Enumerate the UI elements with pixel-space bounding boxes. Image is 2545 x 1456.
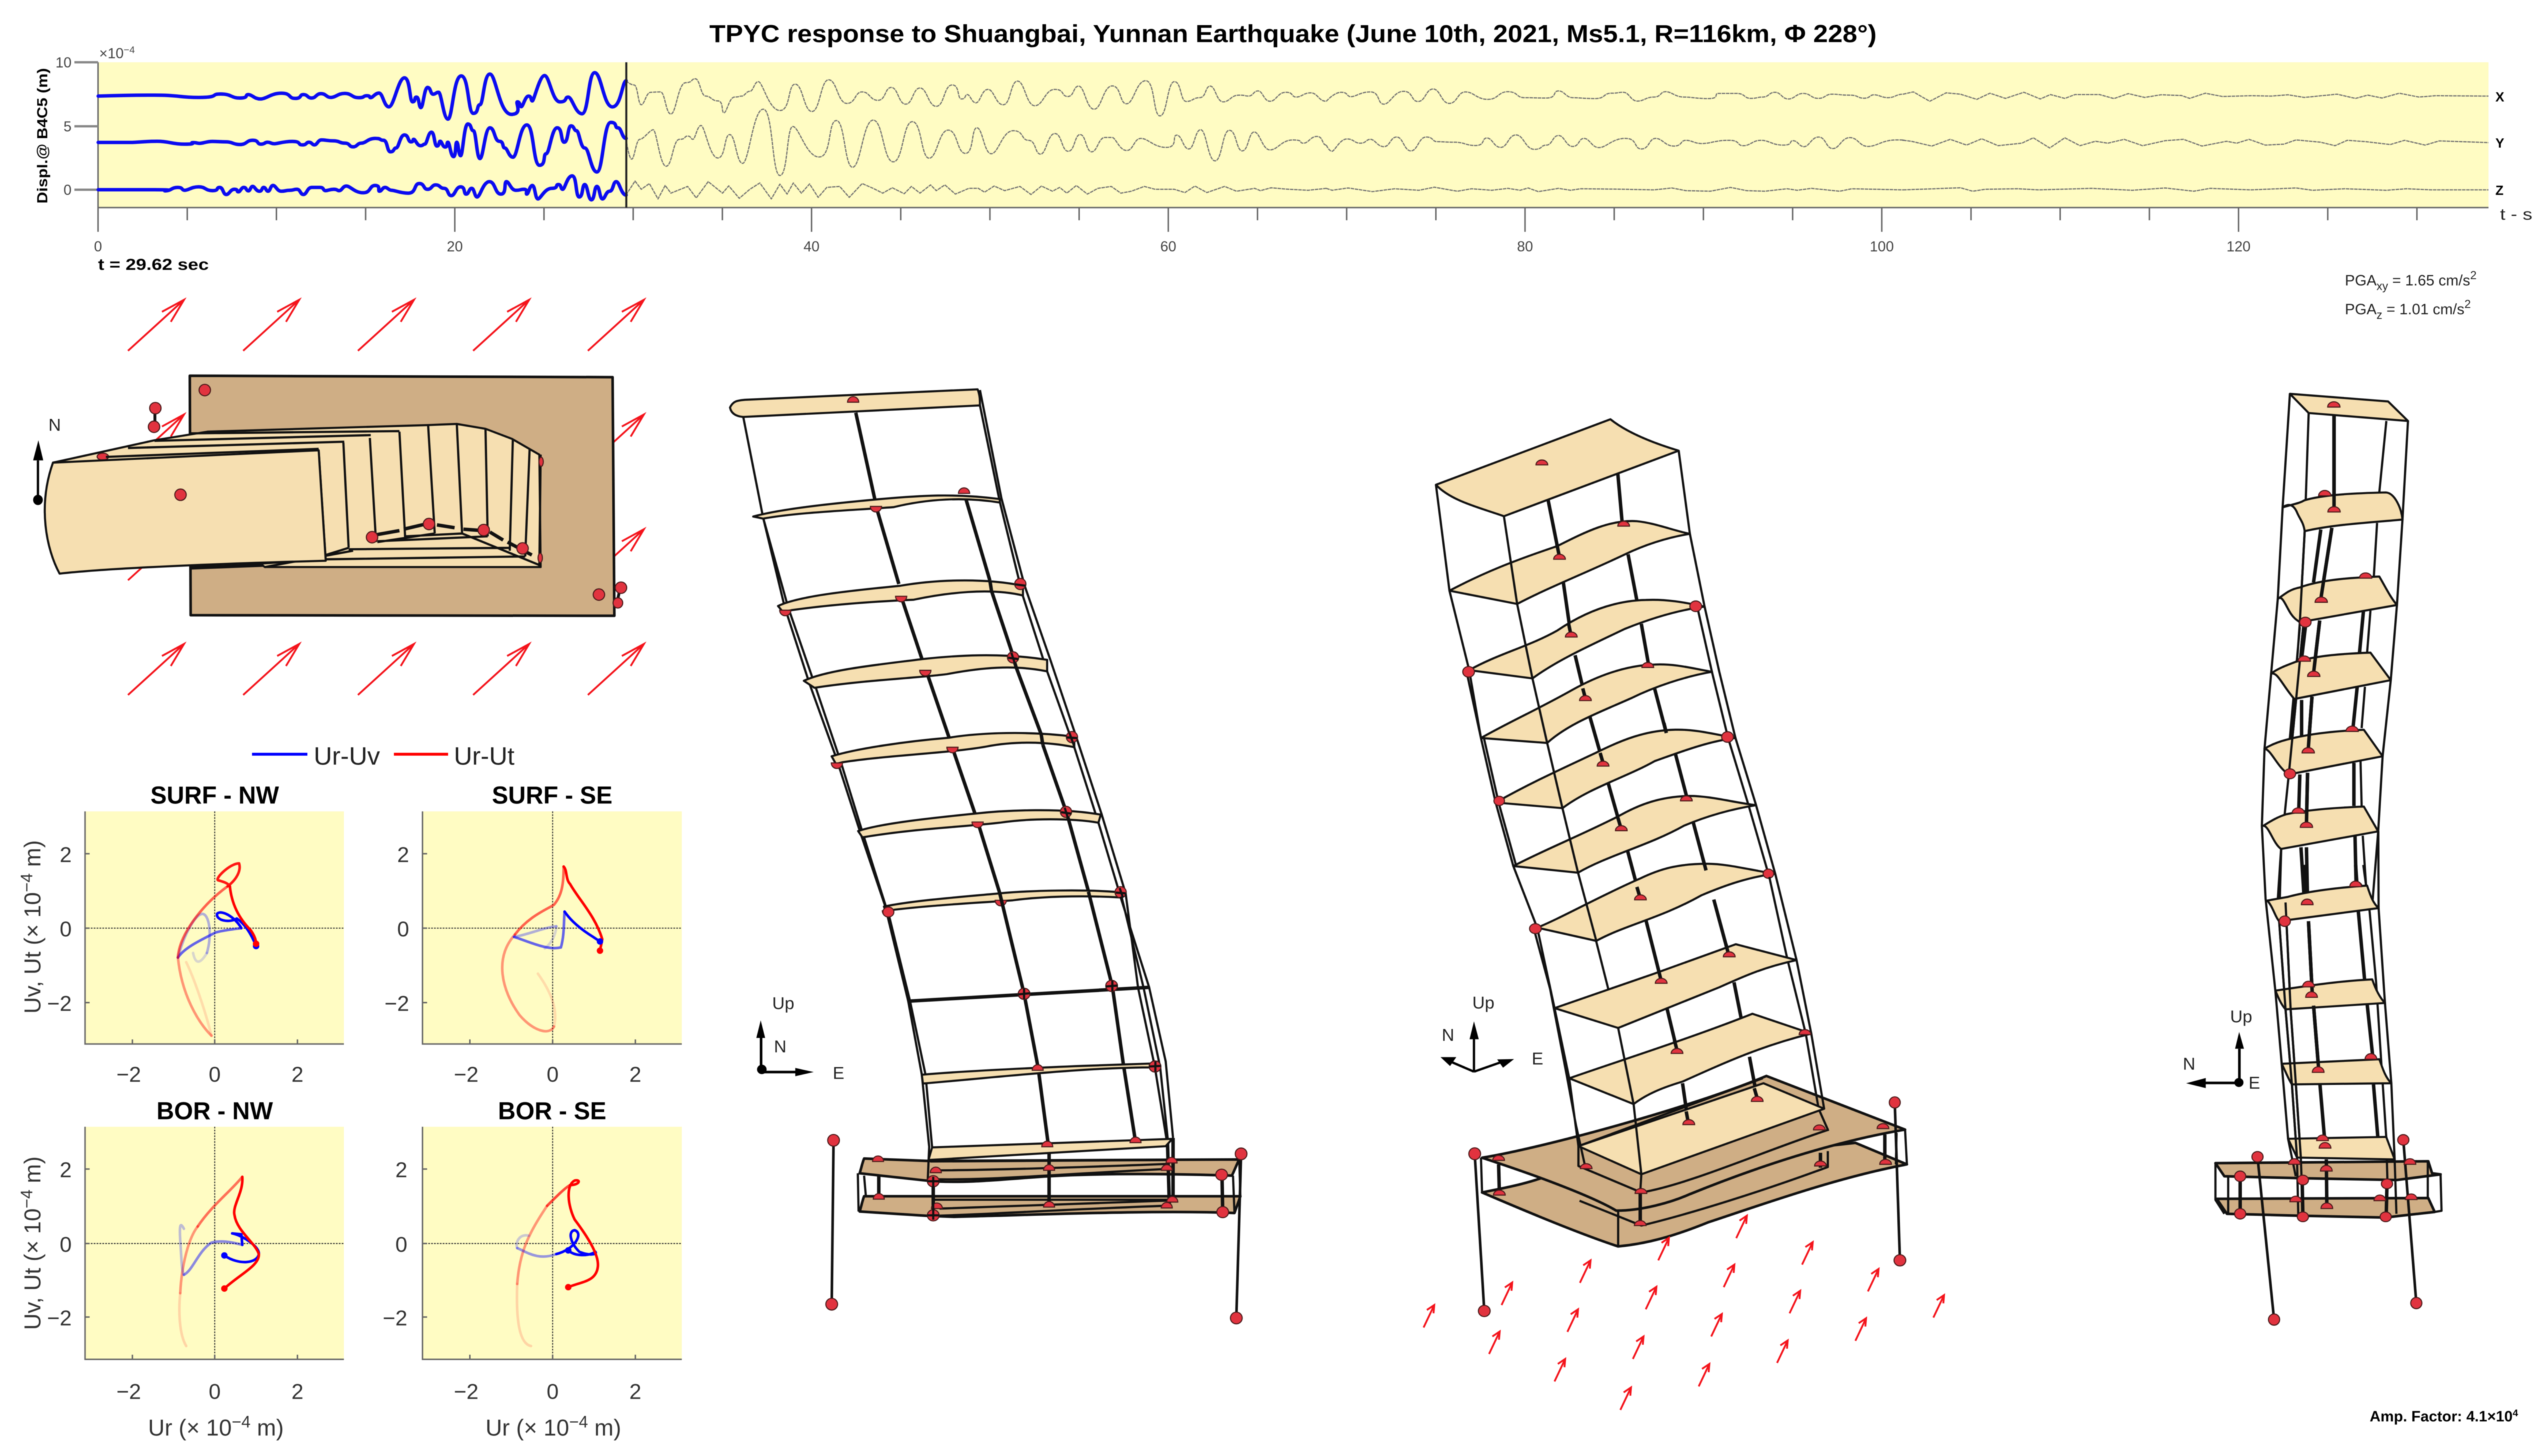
- x axis title: −4: [569, 1413, 588, 1431]
- roof: [45, 450, 326, 574]
- axis lines and ticks: [98, 62, 2488, 232]
- sensors: [1493, 924, 1892, 1225]
- ground motion arrows: [128, 300, 644, 695]
- tick labels: −2: [47, 991, 72, 1015]
- y axis title: −4: [18, 873, 36, 892]
- plot background: [98, 62, 2488, 208]
- upper slab: [1482, 1076, 1905, 1211]
- legend: [252, 742, 514, 770]
- tick labels: −2: [454, 1379, 479, 1404]
- compass labels: [772, 994, 844, 1083]
- tick labels: 2: [291, 1379, 303, 1404]
- tick labels: 0: [209, 1062, 221, 1086]
- compass labels: E: [2249, 1074, 2260, 1093]
- tick labels: 2: [397, 842, 409, 867]
- panel title: SURF - NW: [151, 782, 279, 809]
- front column lower and column stubs: [1618, 1028, 1641, 1192]
- compass: north up east: [2186, 1032, 2244, 1088]
- orbit panels: [18, 782, 682, 1441]
- lower slab: [1482, 1143, 1907, 1247]
- tick labels: 2: [629, 1062, 641, 1086]
- slab and column strokes over sensors: [927, 981, 1161, 1220]
- compass labels: N: [774, 1037, 787, 1056]
- title: TPYC response to Shuangbai, Yunnan Earthquake (June 10th, 2021, Ms5.1, R=116km, Φ 228°): [709, 20, 1877, 48]
- y axis labels: −4: [123, 44, 135, 55]
- floor slabs: [2264, 394, 2408, 849]
- sensors: [2284, 402, 2372, 887]
- basement slab: [190, 376, 614, 616]
- slab edge strokes over sensors: [1008, 584, 1126, 897]
- x axis title: −4: [232, 1413, 250, 1431]
- current time cursor: [625, 62, 627, 208]
- y axis labels: ×10: [99, 46, 123, 62]
- piles: [2257, 1140, 2416, 1319]
- building: isometric view: [1423, 419, 1944, 1410]
- tick labels: −2: [454, 1062, 479, 1086]
- time axis title: t - s: [2500, 205, 2532, 223]
- compass labels: [2183, 1007, 2260, 1093]
- peak ground acceleration notes: PGA: [2345, 300, 2377, 318]
- tick labels: −2: [116, 1379, 141, 1404]
- y axis labels: 0: [63, 182, 72, 198]
- tick labels: 0: [60, 917, 72, 941]
- orbit traces: [502, 867, 603, 1031]
- panel title: BOR - SE: [498, 1097, 606, 1124]
- x axis title: m): [588, 1416, 621, 1441]
- x axis labels: 40: [803, 239, 819, 255]
- tick labels: 0: [209, 1379, 221, 1404]
- peak ground acceleration notes: 2: [2470, 269, 2476, 282]
- remaining traces, grey: [626, 79, 2488, 199]
- sensors: [1463, 460, 1774, 900]
- chart: displacement time history: [35, 44, 2532, 255]
- floor slabs: [730, 389, 1121, 911]
- tick labels: −2: [385, 991, 409, 1015]
- peak ground acceleration notes: 2: [2464, 298, 2471, 311]
- tick labels: 0: [397, 917, 409, 941]
- elapsed time label: t = 29.62 sec: [98, 255, 209, 273]
- tick labels: 2: [60, 842, 72, 867]
- compass labels: N: [2183, 1055, 2196, 1074]
- tick labels: [385, 842, 641, 1086]
- x axis labels: 60: [1160, 239, 1176, 255]
- y axis title: Uv, Ut (× 10: [20, 1209, 46, 1330]
- tick labels: 2: [395, 1158, 407, 1182]
- y axis labels: [55, 44, 135, 198]
- piles: [826, 1134, 1247, 1324]
- tick labels: 0: [547, 1062, 559, 1086]
- peak ground acceleration notes: PGA: [2345, 272, 2377, 289]
- columns: [2266, 831, 2396, 1216]
- north label: N: [48, 416, 61, 435]
- elapsed traces, blue: [98, 73, 626, 200]
- legend: Ur-Uv: [314, 742, 380, 770]
- x axis title: Ur (× 10: [148, 1416, 232, 1441]
- component labels: X: [2495, 89, 2505, 104]
- peak ground acceleration notes: [2345, 269, 2476, 322]
- floor slabs: [2267, 886, 2394, 1160]
- lower slabs: [858, 1138, 1240, 1217]
- panel: BOR - SE: [383, 1097, 682, 1441]
- piles: [1469, 1097, 1906, 1316]
- peak ground acceleration notes: = 1.65 cm/s: [2388, 272, 2470, 289]
- compass labels: E: [1532, 1049, 1543, 1069]
- compass labels: Up: [1472, 994, 1494, 1013]
- x axis labels: 120: [2227, 239, 2250, 255]
- upper floors: [1436, 419, 1775, 941]
- front column and column stubs on floors: [1504, 516, 1596, 941]
- orbit traces: [179, 1177, 259, 1346]
- sensors: [2235, 881, 2422, 1325]
- y axis title: Uv, Ut (× 10: [20, 892, 46, 1014]
- tick labels: −2: [383, 1305, 407, 1330]
- x axis title: m): [250, 1416, 284, 1441]
- lower floors stack: [53, 424, 543, 568]
- y axis title: Displ.@ B4C5 (m): [35, 68, 51, 204]
- orbit traces: [178, 863, 260, 1036]
- panel title: BOR - NW: [156, 1097, 273, 1124]
- sensor on basement: [148, 385, 627, 608]
- panel: SURF - SE: [385, 782, 682, 1086]
- amplification factor note: 4: [2513, 1408, 2518, 1419]
- tick labels: 2: [60, 1158, 72, 1182]
- y axis labels: 10: [55, 55, 72, 71]
- component labels: [2495, 89, 2505, 198]
- component labels: Y: [2495, 136, 2504, 151]
- tick labels: [47, 842, 303, 1086]
- x axis labels: 0: [94, 239, 102, 255]
- legend: Ur-Ut: [454, 742, 514, 770]
- x axis labels: 80: [1517, 239, 1533, 255]
- orbit traces: [517, 1180, 598, 1346]
- compass labels: E: [833, 1064, 844, 1083]
- compass labels: Up: [772, 994, 794, 1013]
- panel: BOR - NW: [18, 1097, 344, 1441]
- compass: up north east: [756, 1020, 814, 1076]
- columns: [743, 390, 1126, 911]
- base slabs: [2216, 1160, 2442, 1217]
- lower floors: [1555, 944, 1824, 1174]
- peak ground acceleration notes: = 1.01 cm/s: [2382, 300, 2464, 318]
- compass: north east up: [1441, 1021, 1514, 1071]
- sensors: [873, 907, 1228, 1221]
- panel: plan view: [33, 300, 644, 695]
- panel title: SURF - SE: [492, 782, 612, 809]
- tick labels: 0: [60, 1232, 72, 1256]
- tick labels: 0: [395, 1232, 407, 1256]
- y axis title: m): [20, 1156, 46, 1190]
- slab frame lines: [1481, 1078, 1907, 1247]
- x axis labels: 20: [447, 239, 463, 255]
- x axis title: Ur (× 10: [486, 1416, 569, 1441]
- north arrow: [33, 441, 43, 505]
- lower columns: [1533, 874, 1828, 1166]
- compass labels: N: [1442, 1026, 1454, 1045]
- columns: [885, 893, 1173, 1180]
- y axis labels: 5: [63, 119, 72, 135]
- compass labels: [1442, 994, 1543, 1069]
- tick labels: 0: [547, 1379, 559, 1404]
- upper floors: [908, 987, 1172, 1160]
- amplification factor note: Amp. Factor: 4.1×10: [2370, 1408, 2513, 1425]
- columns: [2262, 394, 2408, 900]
- tick labels: 2: [291, 1062, 303, 1086]
- peak ground acceleration notes: z: [2377, 309, 2382, 322]
- tick labels: −2: [116, 1062, 141, 1086]
- x axis labels: 100: [1870, 239, 1894, 255]
- compass labels: Up: [2230, 1007, 2252, 1026]
- peak ground acceleration notes: xy: [2377, 280, 2388, 293]
- tick labels: [383, 1158, 641, 1404]
- ground motion arrows: [1423, 1216, 1944, 1410]
- tick labels: 2: [629, 1379, 641, 1404]
- back columns: [1436, 451, 1775, 928]
- roof sensor: [175, 489, 186, 501]
- panel: SURF - NW: [18, 782, 344, 1086]
- x axis labels: [94, 239, 2250, 255]
- sensors: [780, 397, 1126, 916]
- building: north-up elevation: [2183, 394, 2442, 1325]
- y axis title: m): [20, 840, 46, 873]
- tick labels: −2: [47, 1305, 72, 1330]
- building: east-north elevation: [730, 389, 1247, 1324]
- component labels: Z: [2495, 183, 2503, 198]
- y axis title: −4: [18, 1190, 36, 1209]
- tick labels: [47, 1158, 303, 1404]
